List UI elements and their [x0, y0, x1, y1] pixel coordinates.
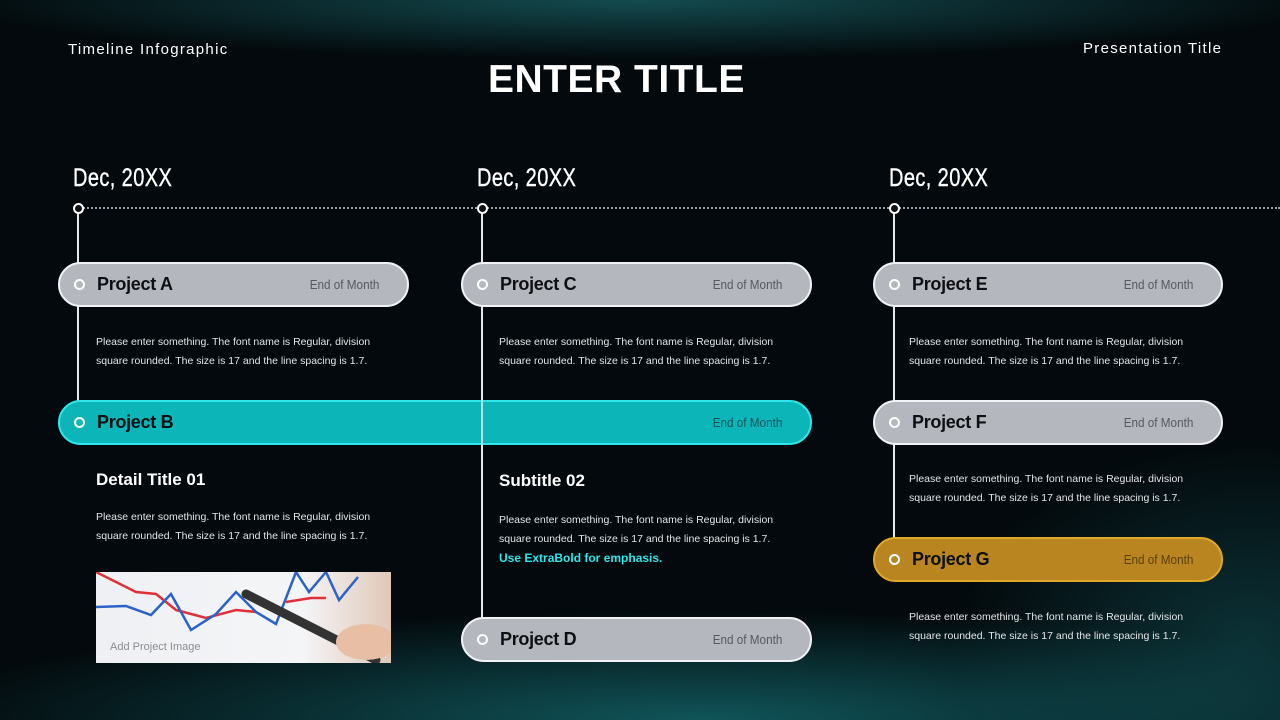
vertical connector 1	[77, 208, 79, 422]
pill: Project F: End of Month	[1123, 415, 1193, 430]
text subtitle 02	[499, 514, 773, 565]
text subtitle 02: square rounded. The size is 17 and the line spacing is 1.7.	[499, 533, 770, 545]
axis node 3	[889, 203, 900, 214]
axis node 2	[477, 203, 488, 214]
text F	[909, 473, 1183, 504]
pill: Project A	[58, 262, 409, 307]
title: ENTER TITLE	[488, 58, 745, 101]
date 1: Dec, 20XX	[73, 164, 172, 192]
pill: Project D: End of Month	[712, 632, 782, 647]
text G: square rounded. The size is 17 and the line spacing is 1.7.	[909, 630, 1180, 642]
pill: Project G: Project G	[912, 549, 989, 569]
pill: Project C: End of Month	[712, 277, 782, 292]
text B	[96, 511, 370, 542]
image caption: Add Project Image	[110, 641, 200, 653]
text G: Please enter something. The font name is Regular, division	[909, 611, 1183, 623]
vertical connector 3	[893, 208, 895, 560]
project image	[96, 572, 391, 663]
text E: square rounded. The size is 17 and the line spacing is 1.7.	[909, 355, 1180, 367]
text A: Please enter something. The font name is Regular, division	[96, 336, 370, 348]
pill: Project B: Project B	[97, 412, 173, 432]
date 3: Dec, 20XX	[889, 164, 988, 192]
pill: Project A: Project A	[97, 274, 173, 294]
header left label: Timeline Infographic	[68, 41, 229, 58]
subtitle 02: Subtitle 02	[499, 471, 585, 490]
text C: Please enter something. The font name is Regular, division	[499, 336, 773, 348]
pill: Project G: End of Month	[1123, 552, 1193, 567]
text G	[909, 611, 1183, 642]
axis node 1	[73, 203, 84, 214]
pill: Project C	[461, 262, 812, 307]
pill: Project D	[461, 617, 812, 662]
text E: Please enter something. The font name is Regular, division	[909, 336, 1183, 348]
text C	[499, 336, 773, 367]
text B: Please enter something. The font name is Regular, division	[96, 511, 370, 523]
header right label: Presentation Title	[1083, 40, 1222, 57]
text A: square rounded. The size is 17 and the line spacing is 1.7.	[96, 355, 367, 367]
pill: Project E	[873, 262, 1223, 307]
vertical connector 2 over B	[481, 400, 483, 445]
text F: square rounded. The size is 17 and the line spacing is 1.7.	[909, 492, 1180, 504]
date 2: Dec, 20XX	[477, 164, 576, 192]
pill: Project E: End of Month	[1123, 277, 1193, 292]
vertical connector 2	[481, 208, 483, 640]
pill: Project G	[873, 537, 1223, 582]
text F: Please enter something. The font name is Regular, division	[909, 473, 1183, 485]
text subtitle 02: Use ExtraBold for emphasis.	[499, 551, 662, 565]
pill: Project A: End of Month	[309, 277, 379, 292]
text E	[909, 336, 1183, 367]
pill: Project D: Project D	[500, 629, 576, 649]
dotted timeline axis	[80, 207, 1280, 209]
text B: square rounded. The size is 17 and the line spacing is 1.7.	[96, 530, 367, 542]
pill: Project C: Project C	[500, 274, 576, 294]
text C: square rounded. The size is 17 and the line spacing is 1.7.	[499, 355, 770, 367]
text subtitle 02: Please enter something. The font name is Regular, division	[499, 514, 773, 526]
text A	[96, 336, 370, 367]
pill: Project F	[873, 400, 1223, 445]
detail title 01: Detail Title 01	[96, 470, 205, 489]
pill: Project B: End of Month	[712, 415, 782, 430]
pill: Project B	[58, 400, 812, 445]
pill: Project E: Project E	[912, 274, 987, 294]
pill: Project F: Project F	[912, 412, 986, 432]
